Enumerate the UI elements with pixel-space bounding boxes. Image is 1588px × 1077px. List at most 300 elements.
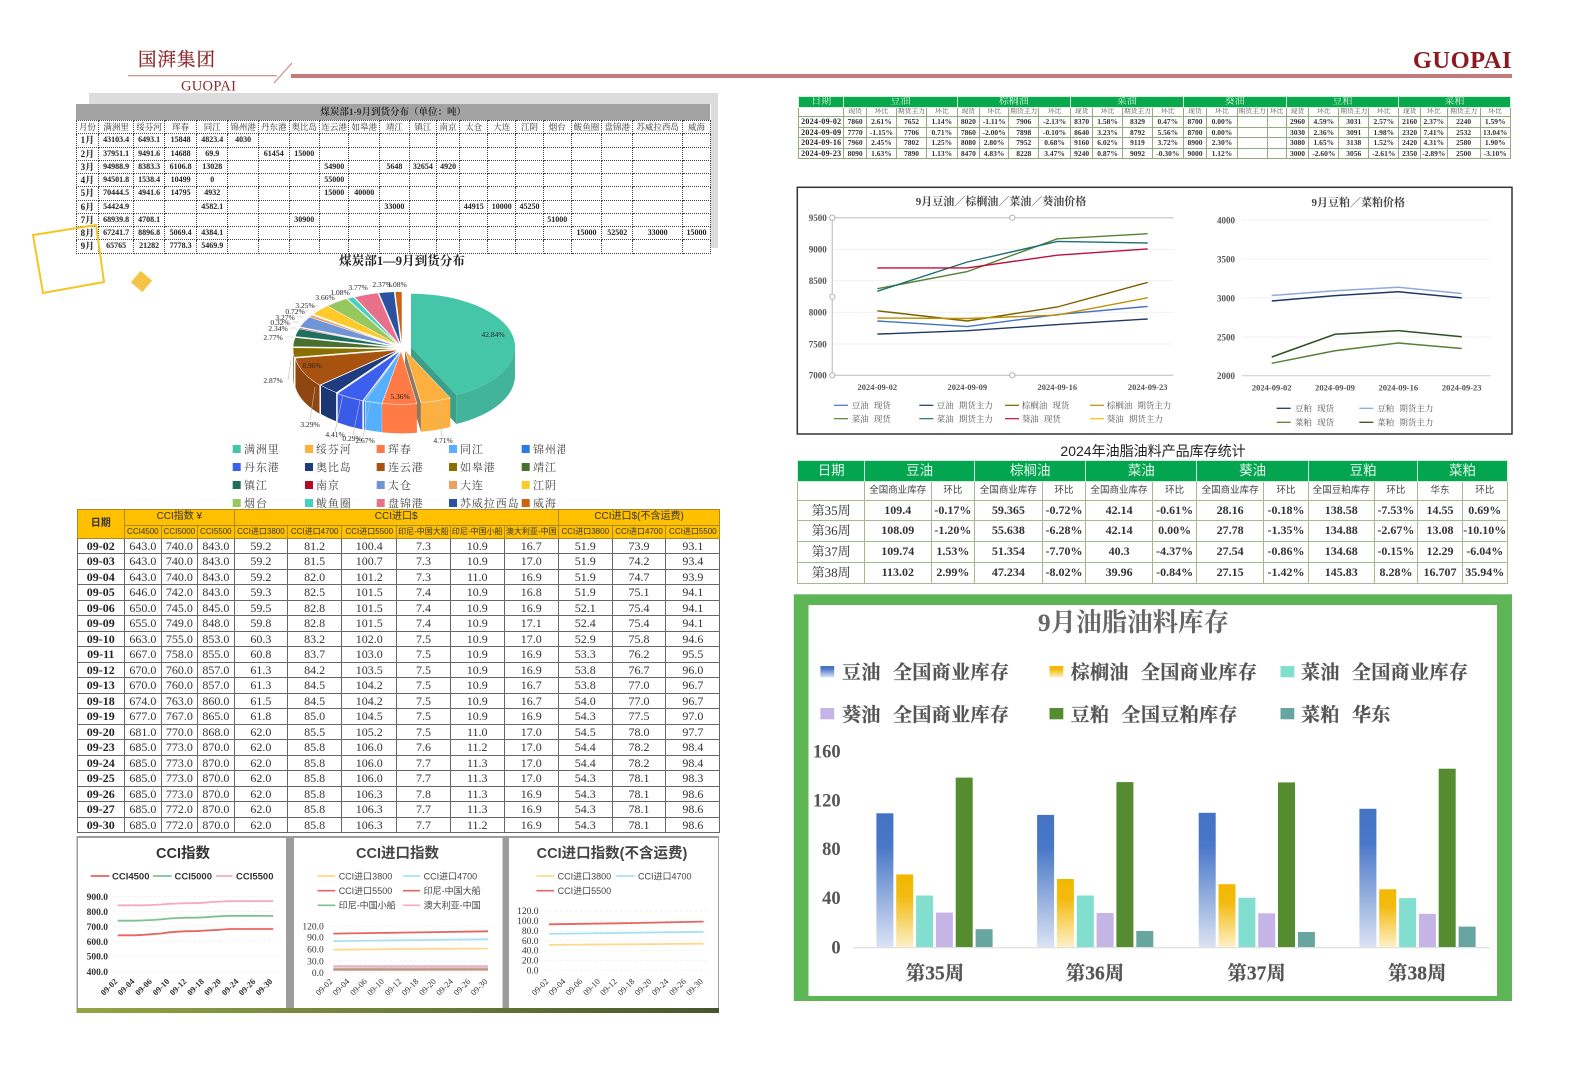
pie legend: 江阴 (533, 479, 557, 492)
table: September oil and meal weekly prices: 环比 (1377, 108, 1391, 115)
table: September oil and meal weekly prices: 3000 (1290, 149, 1305, 158)
table: oil and meal weekly inventory: -6.28% (1045, 523, 1082, 537)
table: September oil and meal weekly prices: 2532 (1456, 128, 1471, 137)
date labels: 09-12 (382, 976, 403, 997)
table: CCI daily index: 62.0 (250, 818, 271, 832)
table: CCI daily index: 681.0 (129, 725, 156, 739)
table: CCI daily index: 75.4 (629, 616, 650, 630)
table: September oil and meal weekly prices: 2.36% (1313, 128, 1334, 137)
table: oil and meal weekly inventory: 第35周 (812, 503, 851, 518)
table: oil and meal weekly inventory: 27.54 (1217, 544, 1244, 558)
pie legend: 鲅鱼圈 (316, 496, 352, 510)
table: coal arrivals by port, Jan to Sep: 煤炭部1-9月到货分布（单位：吨） (320, 108, 466, 118)
date labels: 09-10 (150, 976, 171, 997)
date labels: 09-30 (468, 976, 489, 997)
table: CCI daily index: CCI进口5500 (345, 526, 393, 536)
table: September oil and meal weekly prices: 3.47% (1044, 149, 1065, 158)
bars: week 38 (1359, 769, 1476, 947)
table: CCI daily index: 82.0 (304, 570, 325, 584)
table: CCI daily index: 澳大利亚-中国 (506, 526, 557, 536)
table: September oil and meal weekly prices: 环比 (1270, 108, 1283, 115)
pie percentage labels: 2.87% (263, 376, 283, 385)
legend: 葵油 现货 (1022, 414, 1061, 424)
date labels: 09-18 (399, 976, 420, 997)
table: September oil and meal weekly prices: 2.80% (984, 138, 1004, 147)
table: CCI daily index: 10.9 (467, 539, 488, 553)
legend (820, 660, 1468, 726)
pie legend: 烟台 (244, 496, 268, 510)
decorative yellow frame and diamond (32, 224, 152, 294)
table: oil and meal weekly inventory: 35.94% (1465, 565, 1504, 579)
table: coal arrivals by port, Jan to Sep: 锦州港 (230, 122, 256, 132)
table: CCI daily index: 870.0 (202, 771, 229, 785)
series lines (877, 234, 1148, 334)
table: oil and meal weekly inventory: 1.53% (936, 544, 969, 558)
date labels: 09-02 (313, 976, 334, 997)
pie legend: 威海 (533, 496, 557, 510)
legend: 菜油 期货主力 (937, 414, 993, 424)
panel: CCI index chart (78, 838, 286, 1008)
table: CCI daily index: 7.5 (416, 678, 431, 692)
axis labels: 40 (822, 889, 841, 909)
axis labels: 7500 (809, 339, 827, 349)
table: coal arrivals by port, Jan to Sep: 70444.5 (103, 188, 129, 197)
axis labels: 500.0 (87, 952, 108, 962)
pie left front slices (293, 348, 401, 432)
table: CCI daily index (76, 509, 720, 833)
table: September oil and meal weekly prices: 8020 (961, 117, 976, 126)
legend: 菜粕 现货 (1295, 418, 1335, 428)
table: oil and meal weekly inventory: 第36周 (812, 523, 851, 538)
table: CCI daily index: CCI4500 (127, 526, 159, 536)
date labels: 09-24 (434, 976, 455, 997)
table: CCI daily index: CCI指数 ¥ (157, 511, 202, 522)
table: coal arrivals by port, Jan to Sep: 54424.9 (103, 202, 129, 211)
table: oil and meal weekly inventory: -1.35% (1267, 523, 1304, 537)
legend: CCI进口5500 (339, 886, 392, 896)
table: CCI daily index: 97.0 (682, 709, 703, 723)
table: September oil and meal weekly prices: 环比 (1101, 108, 1114, 115)
pie percentage labels (263, 280, 505, 445)
pie legend: 连云港 (388, 460, 424, 474)
table: September oil and meal weekly prices: 期货主力 (1239, 108, 1266, 115)
table: CCI daily index: 52.1 (575, 601, 596, 615)
table: CCI daily index: 51.9 (575, 554, 596, 568)
table: CCI daily index: 102.0 (356, 632, 383, 646)
table: CCI daily index: 82.5 (304, 585, 325, 599)
table: CCI daily index: 740.0 (166, 554, 193, 568)
legend: 棕榈油 全国商业库存 (1071, 660, 1257, 684)
table: oil and meal weekly inventory: -0.72% (1045, 503, 1082, 517)
table: oil and meal weekly inventory: 51.354 (992, 544, 1025, 558)
table: CCI daily index: 773.0 (166, 740, 193, 754)
table: coal arrivals by port, Jan to Sep: 69.9 (205, 149, 219, 158)
table: CCI daily index: 98.6 (682, 802, 703, 816)
pie percentage labels: 42.84% (481, 330, 505, 339)
legend: CCI进口3800 (339, 872, 392, 882)
table: CCI daily index: CCI进口4700 (615, 526, 663, 536)
legend: CCI进口5500 (558, 886, 611, 896)
pie legend: 珲春 (388, 443, 412, 456)
table: September oil and meal weekly prices: 7906 (1016, 117, 1031, 126)
table: CCI daily index: 7.7 (416, 802, 431, 816)
table: CCI daily index: 857.0 (202, 663, 229, 677)
table: September oil and meal weekly prices: 2240 (1456, 117, 1471, 126)
table: coal arrivals by port, Jan to Sep (76, 104, 711, 254)
table: September oil and meal weekly prices: 8700 (1187, 117, 1202, 126)
table: CCI daily index: 101.5 (356, 601, 383, 615)
axis labels: 7000 (809, 371, 827, 381)
pie slice: Suifenhe 4.71% (405, 350, 450, 432)
table: CCI daily index: 75.1 (629, 585, 650, 599)
table: September oil and meal weekly prices: 0.00% (1212, 128, 1232, 137)
table: oil and meal weekly inventory: 2.99% (936, 565, 969, 579)
axis labels: 400.0 (87, 968, 108, 978)
table: CCI daily index: CCI5000 (164, 526, 195, 536)
table: CCI daily index: 10.9 (467, 694, 488, 708)
table: CCI daily index: 760.0 (166, 678, 193, 692)
table: coal arrivals by port, Jan to Sep: 15848 (171, 135, 191, 144)
table: CCI daily index: 16.7 (521, 694, 542, 708)
axis labels: 30.0 (307, 957, 324, 967)
table: CCI daily index: 740.0 (166, 539, 193, 553)
date labels: 09-30 (684, 976, 705, 997)
panel: September price line charts (796, 186, 1513, 435)
line chart: oil prices: 2024-09-23 (1128, 382, 1168, 392)
table: coal arrivals by port, Jan to Sep: 4月 (81, 175, 94, 185)
table: CCI daily index: 7.3 (416, 554, 431, 568)
table: CCI daily index: 7.5 (416, 647, 431, 661)
table: CCI daily index: 09-18 (87, 694, 115, 708)
date labels: 09-12 (598, 976, 619, 997)
table: September oil and meal weekly prices: 8470 (961, 149, 976, 158)
table: CCI daily index: 740.0 (166, 570, 193, 584)
table: oil and meal weekly inventory: 13.08 (1426, 523, 1453, 537)
table: CCI daily index: 677.0 (129, 709, 156, 723)
table: CCI daily index: 62.0 (250, 725, 271, 739)
table: September oil and meal weekly prices: 4.31% (1424, 138, 1444, 147)
table: CCI daily index: 674.0 (129, 694, 156, 708)
axis labels: 120.0 (517, 907, 539, 917)
pie legend: 同江 (460, 443, 484, 456)
axis labels: 40.0 (522, 947, 539, 957)
table: CCI daily index: 685.0 (129, 740, 156, 754)
table: oil and meal weekly inventory: 菜油 (1128, 463, 1155, 478)
table: coal arrivals by port, Jan to Sep: 4932 (204, 188, 220, 197)
baseline (854, 947, 1490, 949)
table: coal arrivals by port, Jan to Sep: 盘锦港 (604, 122, 630, 132)
table: CCI daily index: 98.4 (682, 756, 703, 770)
table: CCI daily index: 106.3 (356, 787, 383, 801)
pie percentage labels: 4.71% (433, 436, 453, 445)
table: coal arrivals by port, Jan to Sep: 15000 (294, 149, 314, 158)
axis labels: 60.0 (522, 937, 539, 947)
table: CCI daily index: 96.0 (682, 663, 703, 677)
line chart: meal prices: 2024-09-16 (1378, 382, 1418, 392)
grey backing panel behind coal table (89, 93, 718, 248)
table: oil and meal weekly inventory: 109.74 (881, 544, 914, 558)
table: coal arrivals by port, Jan to Sep: 1月 (81, 135, 94, 145)
legend: 菜粕 期货主力 (1377, 418, 1433, 428)
legend: 葵油 期货主力 (1107, 414, 1163, 424)
table: CCI daily index: 94.1 (682, 585, 703, 599)
table: CCI daily index: 643.0 (129, 570, 156, 584)
pie percentage labels: 1.08% (387, 280, 407, 289)
table: CCI daily index: 日期 (91, 518, 111, 529)
table: coal arrivals by port, Jan to Sep: 8月 (81, 228, 94, 238)
table: CCI daily index: 16.9 (521, 663, 542, 677)
table: September oil and meal weekly prices: 环比 (1161, 108, 1175, 115)
axis labels: 2000 (1217, 371, 1236, 381)
table: September oil and meal weekly prices: -1.15% (870, 128, 893, 137)
table: CCI daily index: 61.3 (250, 678, 271, 692)
table: oil and meal weekly inventory: -1.42% (1267, 565, 1304, 579)
table: September oil and meal weekly prices (798, 96, 1511, 159)
axis labels (813, 742, 841, 958)
table: September oil and meal weekly prices: 8329 (1130, 117, 1145, 126)
table: coal arrivals by port, Jan to Sep: 镇江 (414, 122, 431, 132)
table: September oil and meal weekly prices: 环比 (935, 108, 949, 115)
table: CCI daily index: CCI进口3800 (561, 526, 609, 536)
table: CCI daily index: 7.4 (416, 585, 431, 599)
table: CCI daily index: 773.0 (166, 787, 193, 801)
table: CCI daily index: 7.5 (416, 632, 431, 646)
date labels: 09-24 (649, 976, 671, 997)
table: oil and meal weekly inventory: -0.61% (1156, 503, 1193, 517)
table: coal arrivals by port, Jan to Sep: 6月 (81, 202, 94, 212)
category labels: 第38周 (1388, 962, 1447, 984)
table: September oil and meal weekly prices: 8370 (1074, 117, 1089, 126)
table: September oil and meal weekly prices: 1.63% (871, 149, 892, 158)
table: September oil and meal weekly prices: 9119 (1130, 138, 1145, 147)
table: CCI daily index: 16.9 (521, 802, 542, 816)
table: CCI daily index: 96.7 (682, 678, 703, 692)
table: oil and meal weekly inventory: 豆粕 (1350, 463, 1377, 478)
table: CCI daily index: 643.0 (129, 554, 156, 568)
table: oil and meal weekly inventory: 环比 (1276, 485, 1295, 496)
table: CCI daily index: 101.5 (356, 585, 383, 599)
table: CCI daily index: 742.0 (166, 585, 193, 599)
table: coal arrivals by port, Jan to Sep: 绥芬河 (136, 122, 162, 132)
table: September oil and meal weekly prices: 4.83% (984, 149, 1004, 158)
legend: CCI进口4700 (424, 872, 477, 882)
axis labels: 9500 (809, 213, 827, 223)
table: oil and meal weekly inventory: 138.58 (1325, 503, 1358, 517)
legend: 豆油 现货 (852, 400, 891, 410)
table: September oil and meal weekly prices: -2.60% (1312, 149, 1335, 158)
table: CCI daily index: 685.0 (129, 756, 156, 770)
table: CCI daily index: 53.8 (575, 678, 596, 692)
table: September oil and meal weekly prices: -2.00% (983, 128, 1006, 137)
table: CCI daily index: 100.4 (356, 539, 383, 553)
table: CCI daily index: 685.0 (129, 802, 156, 816)
table: CCI daily index: 7.8 (416, 787, 431, 801)
pie leader lines (285, 306, 442, 437)
table: September oil and meal weekly prices: 1.65% (1313, 138, 1334, 147)
table: CCI daily index: 83.7 (304, 647, 325, 661)
table: CCI daily index: 84.5 (304, 694, 325, 708)
CCI line charts strip (76, 836, 719, 1013)
bars: week 37 (1199, 782, 1315, 947)
pie percentage labels: 1.08% (330, 288, 350, 297)
table: September oil and meal weekly prices: 7770 (848, 128, 863, 137)
table: CCI daily index: 685.0 (129, 771, 156, 785)
table: coal arrivals by port, Jan to Sep: 6106.8 (170, 162, 192, 171)
table: September oil and meal weekly prices: 8700 (1187, 128, 1202, 137)
pie chart title: 煤炭部1—9月到货分布 (339, 254, 465, 268)
table: September oil and meal weekly prices: 3.23% (1097, 128, 1118, 137)
table: CCI daily index: 17.0 (521, 725, 542, 739)
table: September oil and meal weekly prices: 3138 (1346, 138, 1361, 147)
table: CCI daily index: 650.0 (129, 601, 156, 615)
pie percentage labels: 3.66% (315, 293, 335, 302)
legend: CCI进口4700 (638, 872, 692, 882)
table: CCI daily index: 773.0 (166, 756, 193, 770)
pie legend (232, 442, 565, 510)
axis labels (87, 893, 108, 978)
table: September oil and meal weekly prices: 2420 (1402, 138, 1417, 147)
axis labels: 3000 (1217, 293, 1236, 303)
legend: 豆粕 现货 (1295, 404, 1335, 414)
table: CCI daily index: 77.0 (629, 694, 650, 708)
axis labels: 9000 (809, 245, 827, 255)
category labels: 第37周 (1227, 962, 1286, 984)
table: CCI daily index: 772.0 (166, 818, 193, 832)
table: CCI daily index: 16.9 (521, 601, 542, 615)
category labels (906, 962, 1447, 984)
table: CCI daily index: 09-26 (87, 787, 115, 801)
table: September oil and meal weekly prices: 2350 (1402, 149, 1417, 158)
legend: 澳大利亚-中国 (424, 900, 481, 911)
table: coal arrivals by port, Jan to Sep: 1538.4 (138, 175, 160, 184)
table: coal arrivals by port, Jan to Sep: 9491.6 (138, 149, 160, 158)
table: CCI daily index: 62.0 (250, 740, 271, 754)
date labels: 09-30 (253, 976, 274, 997)
table: CCI daily index: 16.9 (521, 709, 542, 723)
legend (536, 872, 692, 896)
table: coal arrivals by port, Jan to Sep: 8896.8 (138, 228, 160, 237)
line chart: oil prices (809, 194, 1173, 424)
table: CCI daily index: 59.2 (250, 539, 271, 553)
table: CCI daily index: CCI进口$ (375, 511, 418, 522)
table: coal arrivals by port, Jan to Sep: 30900 (294, 215, 314, 224)
table: September oil and meal weekly prices: 9240 (1074, 149, 1089, 158)
table: CCI daily index: 54.4 (575, 740, 596, 754)
table: coal arrivals by port, Jan to Sep: 44915 (464, 202, 484, 211)
table: coal arrivals by port, Jan to Sep: 5069.4 (170, 228, 192, 237)
table: September oil and meal weekly prices: 7952 (1016, 138, 1031, 147)
table: oil and meal weekly inventory: 环比 (1165, 485, 1184, 496)
table: CCI daily index: 843.0 (202, 570, 229, 584)
table: CCI daily index: 7.4 (416, 601, 431, 615)
line chart: meal prices: 2024-09-23 (1442, 382, 1482, 392)
table: September oil and meal weekly prices: 2.45% (871, 138, 892, 147)
table: coal arrivals by port, Jan to Sep: 51000 (547, 215, 567, 224)
pie percentage labels: 2.67% (355, 436, 375, 445)
table: CCI daily index: 16.7 (521, 539, 542, 553)
table: September oil and meal weekly prices: 现货 (1188, 108, 1202, 115)
table: CCI daily index: 10.9 (467, 616, 488, 630)
table: September oil and meal weekly prices: 8080 (961, 138, 976, 147)
table: CCI daily index: 11.3 (467, 787, 488, 801)
date labels: 09-18 (185, 976, 206, 997)
table: September oil and meal weekly prices: 8900 (1187, 138, 1202, 147)
table: CCI daily index: 98.3 (682, 771, 703, 785)
table: CCI daily index: 667.0 (129, 647, 156, 661)
table: oil and meal weekly inventory: 全国商业库存 (869, 485, 926, 496)
table: September oil and meal weekly prices: 1.98% (1373, 128, 1394, 137)
table: coal arrivals by port, Jan to Sep: 3月 (81, 162, 94, 172)
table: coal arrivals by port, Jan to Sep: 丹东港 (261, 122, 287, 132)
table: September oil and meal weekly prices: 环比 (875, 108, 888, 115)
table: CCI daily index: 54.3 (575, 709, 596, 723)
axis labels: 90.0 (307, 934, 324, 944)
table: September oil and meal weekly prices: 环比 (1488, 108, 1502, 115)
table: coal arrivals by port, Jan to Sep: 南京 (440, 122, 457, 132)
table: September oil and meal weekly prices: 现货 (848, 108, 862, 115)
table: September oil and meal weekly prices: -0.30% (1156, 149, 1179, 158)
table: CCI daily index: 16.7 (521, 678, 542, 692)
table: CCI daily index: 7.5 (416, 694, 431, 708)
table: coal arrivals by port, Jan to Sep: 33000 (384, 202, 404, 211)
pie legend: 镇江 (244, 478, 268, 492)
table: September oil and meal weekly prices: 4.59% (1313, 117, 1334, 126)
table: September oil and meal weekly prices: 3030 (1290, 128, 1305, 137)
table: CCI daily index: 78.1 (629, 787, 650, 801)
table: September oil and meal weekly prices: 1.58% (1097, 117, 1118, 126)
table: coal arrivals by port, Jan to Sep: 14688 (171, 149, 191, 158)
table: CCI daily index: 54.3 (575, 818, 596, 832)
table: oil and meal weekly inventory (797, 460, 1508, 584)
table: CCI daily index: 843.0 (202, 585, 229, 599)
table: CCI daily index: 83.2 (304, 632, 325, 646)
table: coal arrivals by port, Jan to Sep: 7月 (81, 215, 94, 225)
table: September oil and meal weekly prices: -0.10% (1043, 128, 1066, 137)
axis labels: 120.0 (302, 922, 324, 932)
category labels: 第36周 (1066, 962, 1124, 984)
table: coal arrivals by port, Jan to Sep: 21282 (139, 241, 159, 250)
table: oil and meal weekly inventory: -6.04% (1466, 544, 1503, 558)
table: CCI daily index: 09-13 (87, 678, 115, 692)
table: CCI daily index: 09-02 (87, 539, 115, 553)
table: CCI daily index: 97.7 (682, 725, 703, 739)
table: CCI daily index: 106.0 (356, 740, 383, 754)
table: oil and meal weekly inventory: 42.14 (1106, 523, 1133, 537)
table: CCI daily index: 101.2 (356, 570, 383, 584)
table: September oil and meal weekly prices: 0.71% (932, 128, 952, 137)
table: CCI daily index: 77.5 (629, 709, 650, 723)
legend: 印尼-中国小船 (339, 900, 396, 911)
table: September oil and meal weekly prices: 9092 (1130, 149, 1145, 158)
table: CCI daily index: 59.5 (250, 601, 271, 615)
table: CCI daily index: 93.9 (682, 570, 703, 584)
table: CCI daily index: 7.5 (416, 709, 431, 723)
pie slice: Manzhouli 42.84% (411, 294, 515, 424)
table: CCI daily index: CCI进口5500 (669, 526, 717, 536)
table: CCI daily index: 09-12 (87, 663, 115, 677)
table: September oil and meal weekly prices: 7960 (848, 138, 863, 147)
legend (318, 872, 481, 911)
table: CCI daily index: 104.2 (356, 678, 383, 692)
legend: 豆油 期货主力 (937, 400, 993, 410)
table: CCI daily index: 74.7 (629, 570, 650, 584)
table: coal arrivals by port, Jan to Sep: 2月 (81, 149, 94, 159)
table: CCI daily index: 54.3 (575, 802, 596, 816)
table: September oil and meal weekly prices: 3056 (1346, 149, 1361, 158)
table: September oil and meal weekly prices: 环比 (1215, 108, 1229, 115)
pie legend: 南京 (316, 478, 340, 492)
table: September oil and meal weekly prices: 1.52% (1373, 138, 1394, 147)
